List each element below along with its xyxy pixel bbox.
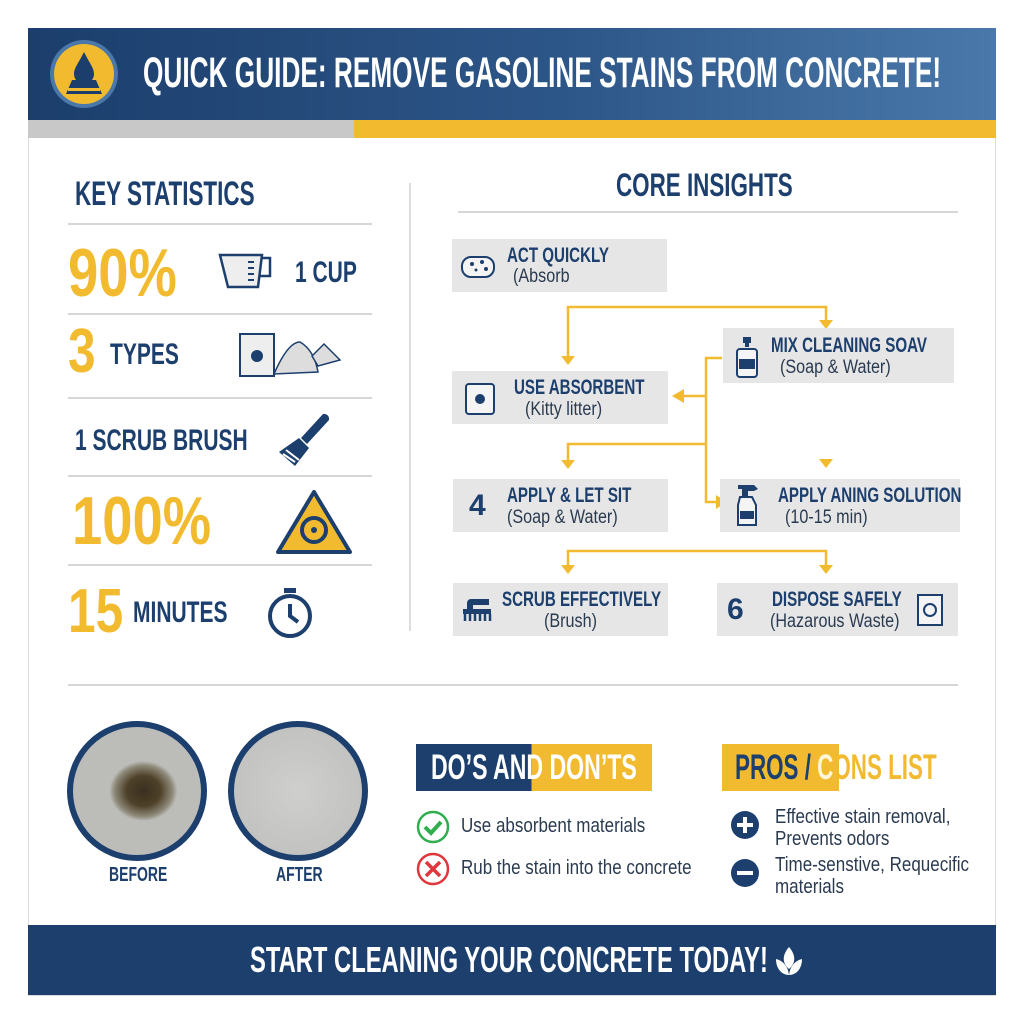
icon: litter bag — [465, 383, 495, 415]
step: act quickly: ACT QUICKLY — [507, 244, 609, 267]
heading: core insights: CORE INSIGHTS — [616, 167, 793, 203]
icon: measuring cup — [218, 254, 272, 288]
item: pro: Effective stain removal, — [775, 806, 950, 828]
step 4: apply & let sit: APPLY & LET SIT — [507, 484, 631, 507]
step: scrub effectively: (Brush) — [544, 611, 597, 632]
item: pro — [731, 806, 950, 850]
step: act quickly — [452, 239, 667, 292]
step: apply cleaning solution — [720, 479, 960, 532]
heading: key statistics: KEY STATISTICS — [75, 175, 255, 213]
item: do — [416, 810, 645, 844]
step: scrub effectively — [453, 583, 668, 636]
step 6: dispose safely: 6 — [727, 593, 744, 626]
item: con: materials — [775, 876, 844, 898]
heading: pros / cons list — [722, 744, 839, 791]
panel: pros / cons: PROS / CONS LIST — [735, 748, 937, 787]
item: don't — [416, 852, 692, 886]
label: before: BEFORE — [109, 864, 167, 886]
step: mix cleaning soap — [723, 328, 954, 383]
icon: sponge — [461, 256, 495, 278]
step: apply cleaning solution: (10-15 min) — [785, 507, 868, 528]
step 6: dispose safely: DISPOSE SAFELY — [772, 588, 902, 611]
step: mix cleaning soap: MIX CLEANING SOAV — [771, 334, 927, 357]
step: use absorbent: USE ABSORBENT — [514, 376, 644, 399]
photo: before — [67, 721, 207, 861]
icon: biohazard warning — [276, 490, 352, 554]
panel: do's and don'ts — [416, 744, 692, 886]
icon: hazardous waste drum — [917, 594, 943, 626]
step: use absorbent: (Kitty litter) — [525, 399, 602, 420]
photo: after — [228, 721, 368, 861]
icon: scrub brush — [463, 599, 492, 621]
step: scrub effectively: SCRUB EFFECTIVELY — [502, 588, 661, 611]
step: mix cleaning soap: (Soap & Water) — [780, 357, 891, 378]
step 4: apply & let sit — [453, 479, 668, 532]
heading: do's and don'ts: DO’S AND DON’TS — [431, 748, 637, 787]
item: don't: Rub the stain into the concrete — [461, 857, 692, 879]
panel: pros / cons — [722, 744, 969, 898]
stat: 3 types: 3 — [68, 317, 96, 386]
stat: 15 minutes — [68, 577, 312, 646]
panel: before / after photos — [67, 721, 368, 886]
divider vertical — [409, 183, 411, 631]
flow arrows — [561, 306, 833, 574]
icon: leaves — [776, 947, 802, 975]
step: apply cleaning solution: APPLY ANING SOLUTION — [778, 484, 961, 507]
header banner — [28, 28, 996, 120]
step: act quickly: (Absorb — [513, 266, 570, 287]
step 6: dispose safely: (Hazarous Waste) — [770, 611, 900, 632]
item: con: Time-senstive, Requecific — [775, 854, 969, 876]
icon: paint brush — [279, 414, 330, 466]
panel: key statistics — [68, 175, 372, 646]
item: pro: Prevents odors — [775, 828, 889, 850]
stat: 3 types: TYPES — [110, 338, 179, 371]
stat: 100% biohazard: 100% — [72, 483, 211, 559]
item: do: Use absorbent materials — [461, 815, 645, 837]
stat: 90% 1 cup: 1 CUP — [295, 256, 357, 289]
stat: 15 minutes: 15 — [68, 577, 123, 646]
icon: soap bottle — [736, 337, 758, 378]
stat: 90% 1 cup — [68, 235, 357, 311]
label: after: AFTER — [276, 864, 323, 886]
stat: 100% biohazard — [72, 483, 352, 559]
step: use absorbent — [452, 371, 668, 424]
stat: 15 minutes: MINUTES — [133, 596, 228, 629]
step 4: apply & let sit: 4 — [469, 489, 486, 522]
item: con — [731, 854, 969, 898]
stat: 90% 1 cup: 90% — [68, 235, 177, 311]
icon: spray bottle — [737, 485, 758, 526]
step 6: dispose safely — [717, 583, 958, 636]
icon: gas stain logo — [50, 40, 118, 108]
stat: 3 types — [68, 317, 342, 386]
icon: absorbent bags — [239, 333, 342, 377]
stat: 1 scrub brush — [75, 414, 330, 466]
footer text: START CLEANING YOUR CONCRETE TODAY! — [250, 939, 768, 980]
title: QUICK GUIDE: REMOVE GASOLINE STAINS FROM CONCRETE! — [143, 49, 941, 97]
icon: stopwatch — [268, 588, 312, 638]
stat: 1 scrub brush: 1 SCRUB BRUSH — [75, 424, 248, 457]
step 4: apply & let sit: (Soap & Water) — [507, 507, 618, 528]
footer banner — [28, 925, 996, 995]
panel: core insights — [452, 167, 961, 636]
